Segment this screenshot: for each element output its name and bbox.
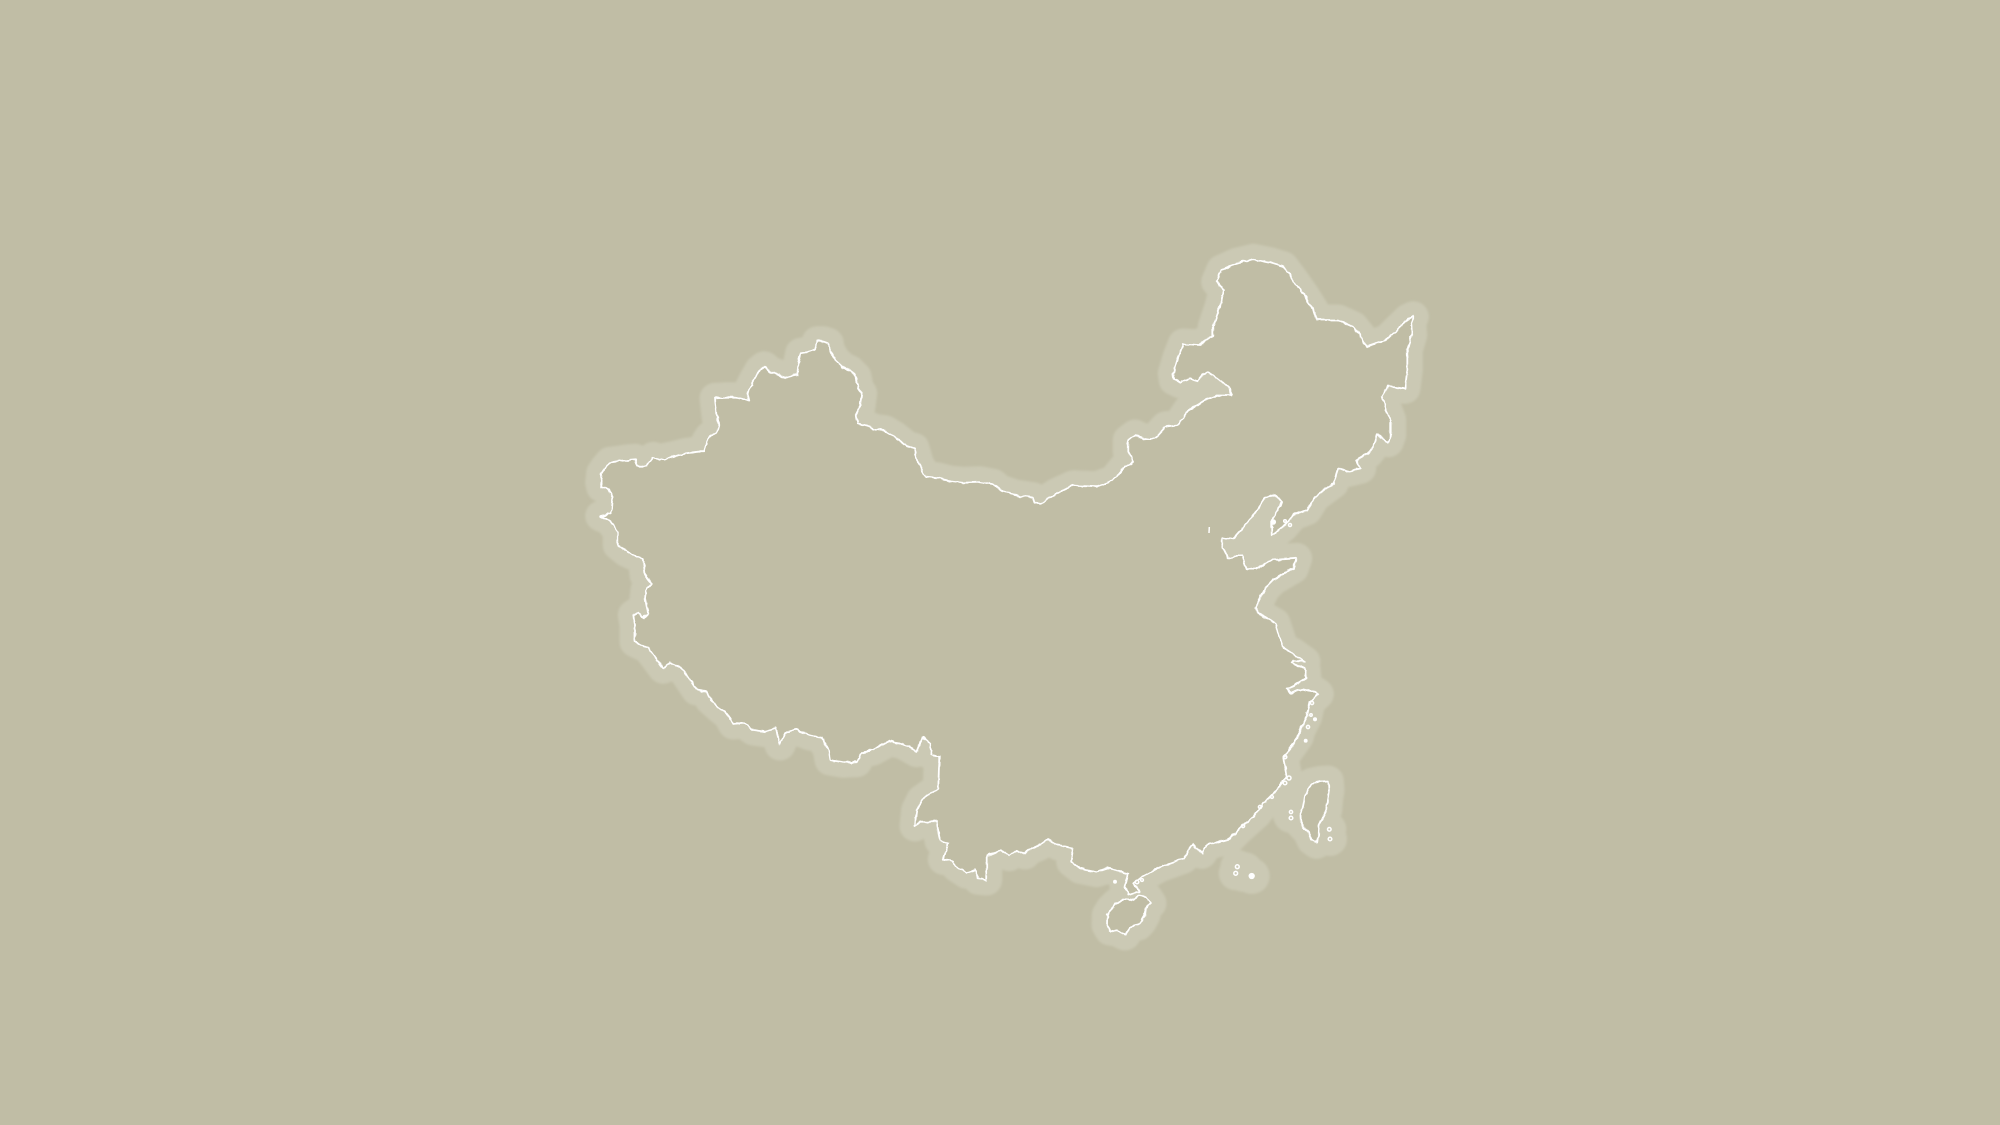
white border line: Taiwan island [1300, 781, 1329, 843]
halo band around the border and islands [601, 259, 1413, 935]
white border line: mainland [601, 259, 1413, 895]
small coastal islands [1114, 520, 1332, 884]
land interiors [601, 259, 1413, 935]
white border line: Hainan island [1107, 896, 1151, 935]
